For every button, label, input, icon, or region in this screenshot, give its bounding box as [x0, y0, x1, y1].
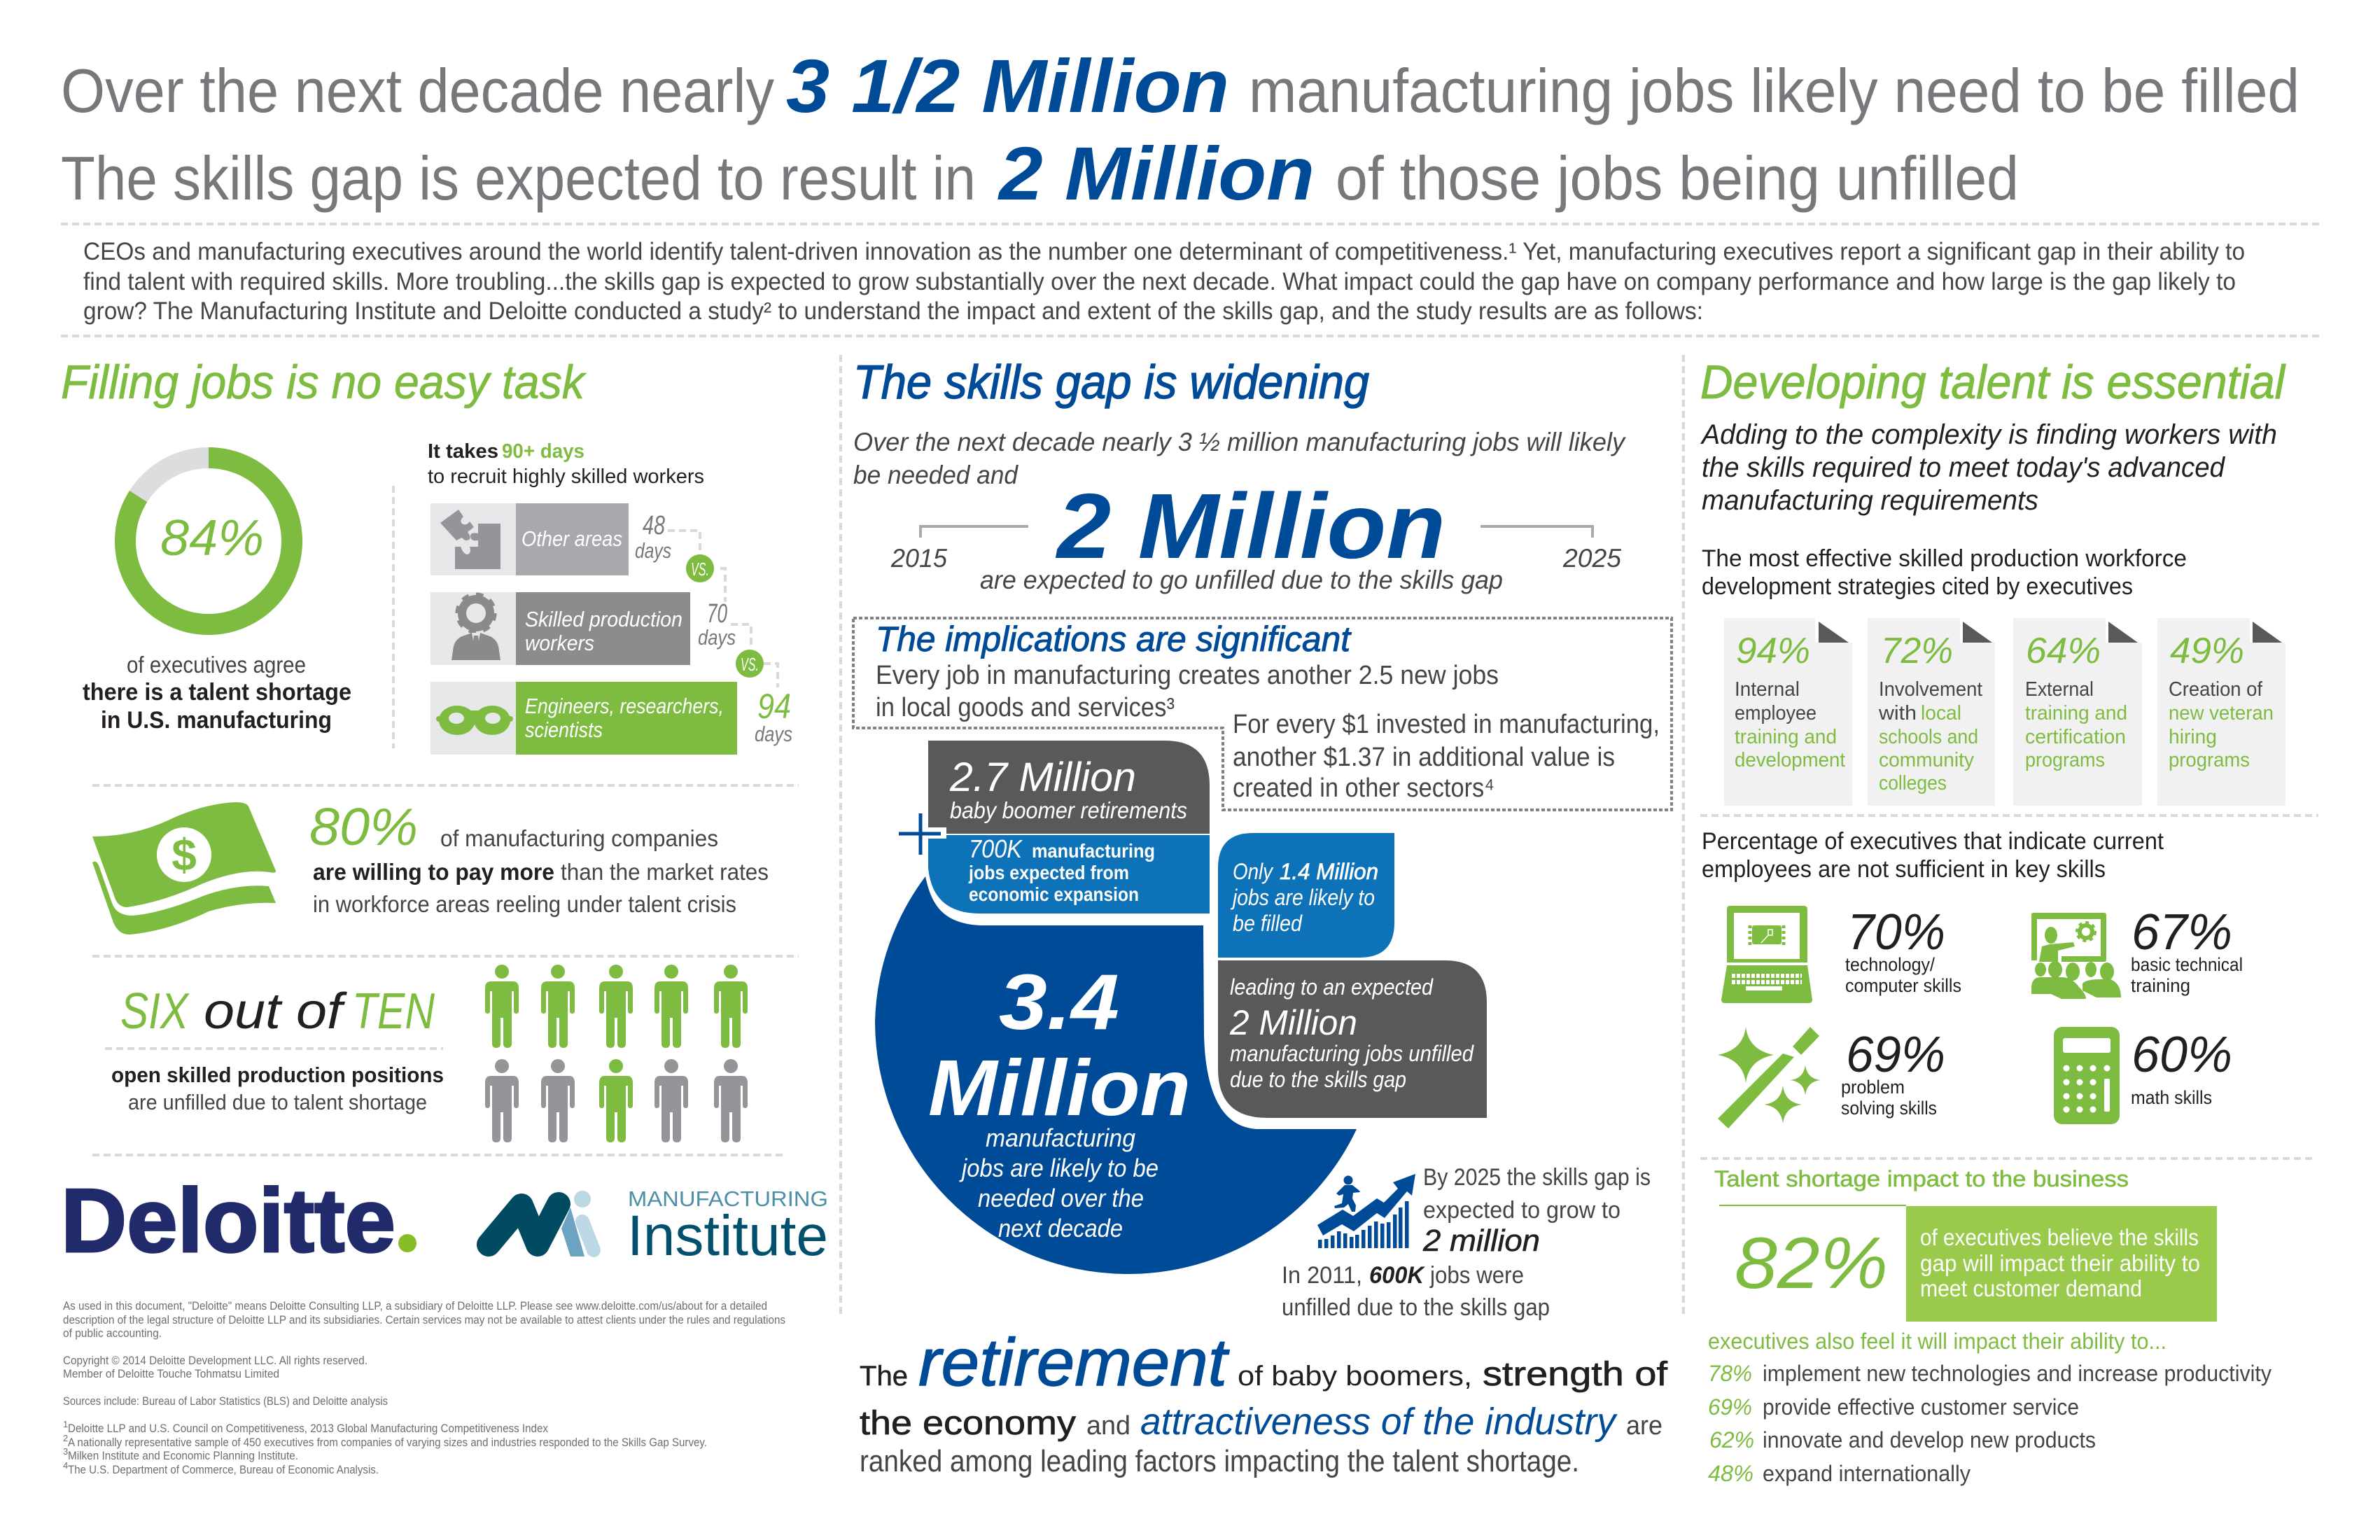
icon: money [92, 802, 276, 934]
block: 1.4 million filled: 1.4 Million [1280, 859, 1378, 884]
subheading: talent shortage impact: Talent shortage impact to the business [1714, 1166, 2129, 1191]
icon: money: $ [172, 830, 197, 880]
card: 94%: 94% [1736, 631, 1810, 671]
title: 3 1/2 Million [786, 43, 1229, 128]
footer legal text: Milken Institute and Economic Planning Institute. [68, 1449, 298, 1462]
card: 94%: employee [1735, 702, 1816, 724]
skill: technical 67%: basic technical [2131, 954, 2243, 975]
callout: implications: created in other sectors⁴ [1233, 774, 1494, 803]
icon: gear person [451, 596, 500, 660]
note: in 2011: jobs were [1429, 1262, 1524, 1289]
closing statement: retirement: the economy [860, 1405, 1076, 1442]
block: 1.4 million filled: jobs are likely to [1230, 885, 1375, 910]
card: 49%: programs [2169, 749, 2250, 771]
icon: puzzle [440, 510, 500, 569]
closing statement: retirement: of baby boomers, [1238, 1361, 1472, 1392]
note: in 2011: In 2011, [1282, 1262, 1362, 1289]
block: 2.7 million retirements: baby boomer retirements [950, 797, 1187, 823]
footer legal text: description of the legal structure of Deloitte LLP and its subsidiaries. Certain services may not be available to attest clients under the rules and regulations [63, 1313, 785, 1326]
note: by 2025: 2 million [1422, 1224, 1540, 1258]
footer legal text: 4 [63, 1460, 68, 1471]
donut caption [83, 652, 351, 734]
donut caption: there is a talent shortage [83, 679, 351, 706]
intro paragraph [83, 238, 2245, 325]
subheading: strategies [1702, 545, 2187, 600]
card: 94%: Internal [1735, 678, 1800, 701]
block: 3.4 million [875, 876, 1357, 1274]
footer legal text: 1 [63, 1419, 68, 1429]
callout: implications: another $1.37 in additional value is [1233, 743, 1615, 772]
heading: developing talent: Developing talent is essential [1700, 356, 2286, 409]
footer legal text: 2 [63, 1433, 68, 1443]
block: 3.4 million: jobs are likely to be [958, 1154, 1158, 1182]
footer legal text: The U.S. Department of Commerce, Bureau of Economic Analysis. [68, 1463, 379, 1476]
block: 2.7 million retirements: 2.7 Million [949, 755, 1136, 800]
stat: six out of ten: TEN [352, 983, 435, 1040]
card: 72%: community [1879, 749, 1974, 771]
icon: calculator [2054, 1027, 2120, 1124]
bar: engineers: Engineers, researchers, [525, 694, 724, 718]
stat: 80% pay more: than the market rates [561, 859, 769, 885]
stat: six out of ten: out of [204, 983, 348, 1040]
block: 1.4 million filled [1218, 833, 1394, 958]
skill: technology 70%: 70% [1847, 904, 1945, 960]
stat: six out of ten: open skilled production positions [111, 1063, 444, 1087]
callout: implications: For every $1 invested in manufacturing, [1233, 710, 1660, 739]
bar: skilled production workers [430, 592, 690, 665]
donut chart: 84% [125, 458, 292, 624]
skill: technology 70%: computer skills [1845, 975, 1961, 996]
intro text: be needed and [853, 461, 1018, 489]
card: 94%: training and [1735, 726, 1837, 748]
intro italic text: the skills required to meet today's advanced [1702, 452, 2226, 483]
days comparison labels: VS. [741, 654, 759, 675]
intro paragraph: grow? The Manufacturing Institute and Deloitte conducted a study² to understand the impact and extent of the skills gap, and the study results are as follows: [83, 298, 1703, 325]
note: by 2025: expected to grow to [1423, 1197, 1620, 1224]
block: 1.4 million filled: be filled [1233, 911, 1303, 936]
list: other impacts: 48% [1708, 1461, 1754, 1486]
skill: math 60%: math skills [2131, 1087, 2212, 1108]
days comparison labels: 48 [643, 511, 665, 540]
title: 2 Million [997, 131, 1315, 216]
block: 700K expansion: economic expansion [969, 883, 1139, 905]
note: by 2025: By 2025 the skills gap is [1423, 1164, 1651, 1191]
skill: math 60%: 60% [2132, 1027, 2232, 1083]
closing statement: retirement: ranked among leading factors impacting the talent shortage. [860, 1444, 1579, 1478]
skill: technical 67%: training [2131, 975, 2190, 996]
footer legal text: Member of Deloitte Touche Tohmatsu Limited [63, 1367, 279, 1380]
days comparison labels [635, 511, 792, 746]
card: 64%: External [2025, 678, 2094, 701]
closing statement: retirement: retirement [918, 1325, 1229, 1400]
stat: six out of ten: are unfilled due to talent shortage [128, 1090, 427, 1114]
logo: Manufacturing Institute [489, 1186, 828, 1268]
recruit heading: 90+ days [502, 440, 584, 463]
closing statement: retirement: strength of [1483, 1356, 1668, 1393]
skill: technical 67% [2031, 904, 2243, 999]
note: in 2011: unfilled due to the skills gap [1282, 1294, 1550, 1321]
footer legal text: 3 [63, 1446, 68, 1457]
icon: presenter and audience [2031, 913, 2121, 999]
footer legal text: of public accounting. [63, 1326, 162, 1340]
block: 2 million unfilled: manufacturing jobs unfilled [1230, 1041, 1474, 1066]
stat: 82%: gap will impact their ability to [1920, 1250, 2200, 1276]
skill: technology 70%: technology/ [1845, 954, 1935, 975]
footer legal text: As used in this document, "Deloitte" means Deloitte Consulting LLP, a subsidiary of Deloitte LLP. Please see www.deloitte.com/us/about for a detailed [63, 1299, 767, 1312]
skill: problem solving 69%: problem [1841, 1077, 1905, 1098]
block: 2 million unfilled [1218, 960, 1487, 1118]
card: 49% [2157, 618, 2286, 806]
list: other impacts [1708, 1329, 2272, 1486]
panel: skills gap widening [853, 356, 1672, 1478]
intro italic text: manufacturing requirements [1702, 485, 2038, 516]
title: The skills gap is expected to result in [61, 144, 976, 213]
list: other impacts: provide effective customer service [1763, 1394, 2079, 1420]
skill: problem solving 69%: solving skills [1841, 1098, 1937, 1119]
card: 72% [1868, 618, 1995, 806]
callout: implications [853, 618, 1672, 810]
recruit heading: to recruit highly skilled workers [428, 465, 704, 488]
days comparison labels: 70 [707, 599, 727, 629]
card: 72%: with [1878, 702, 1917, 724]
card: 64% [2013, 618, 2142, 806]
block: 700K expansion: 700K [969, 834, 1023, 863]
bar: other areas [430, 503, 629, 575]
heading: skills gap: The skills gap is widening [853, 356, 1369, 409]
bar: skilled production workers: Skilled production [525, 607, 682, 631]
list: other impacts: executives also feel it will impact their ability to... [1708, 1329, 2166, 1354]
stat: six out of ten [111, 983, 444, 1114]
card: 72%: local [1921, 702, 1961, 724]
block: 2 million unfilled: due to the skills gap [1230, 1067, 1406, 1092]
stat: 80% pay more: in workforce areas reeling under talent crisis [313, 891, 736, 917]
card: 64%: training and [2025, 702, 2127, 724]
skill: technical 67%: 67% [2132, 904, 2232, 960]
card: 72%: schools and [1879, 726, 1978, 748]
plus sign [899, 813, 946, 855]
list: other impacts: expand internationally [1763, 1461, 1970, 1486]
card: 49%: new veteran [2169, 702, 2274, 724]
title: Over the next decade nearly [61, 56, 774, 125]
panel: filling jobs [61, 356, 792, 755]
stat: 82% [1719, 1205, 2217, 1322]
days comparison labels: days [755, 722, 792, 746]
timeline: 2 million 2015 to 2025 [890, 475, 1621, 594]
block: 3.4 million: next decade [998, 1214, 1123, 1242]
card: 49%: 49% [2170, 631, 2244, 671]
footer legal text: A nationally representative sample of 450 executives from companies of varying sizes and industries responded to the Skills Gap Survey. [68, 1436, 707, 1449]
subheading: key skills: employees are not sufficient in key skills [1702, 856, 2106, 883]
skill: math 60% [2054, 1027, 2232, 1124]
list: other impacts: 78% [1708, 1361, 1752, 1386]
title: of those jobs being unfilled [1336, 144, 2019, 213]
skill: technology 70% [1721, 904, 1961, 1003]
intro text [853, 428, 1626, 489]
stat: 80% pay more: of manufacturing companies [440, 825, 718, 851]
card: 72%: 72% [1881, 631, 1953, 671]
closing statement: retirement [860, 1325, 1668, 1478]
stat: 80% pay more: are willing to pay more [313, 859, 554, 885]
bar: other areas: Other areas [522, 526, 622, 551]
closing statement: retirement: are [1626, 1411, 1662, 1441]
icon: glasses [436, 706, 513, 735]
donut caption: in U.S. manufacturing [101, 707, 332, 734]
card: 49%: Creation of [2169, 678, 2263, 701]
bar: engineers: scientists [525, 718, 603, 742]
timeline: 2 million 2015 to 2025: 2015 [890, 544, 947, 573]
skill: problem solving 69% [1718, 1027, 1945, 1128]
intro italic text [1700, 419, 2277, 516]
skill: problem solving 69%: 69% [1846, 1027, 1945, 1083]
intro text: Over the next decade nearly 3 ½ million manufacturing jobs will likely [853, 428, 1626, 456]
block: 3.4 million: 3.4 [999, 958, 1119, 1046]
footer legal text [63, 1299, 785, 1476]
icon: growth chart with runner [1317, 1174, 1415, 1248]
logo: Manufacturing Institute: MANUFACTURING [628, 1186, 828, 1211]
stat: six out of ten: SIX [120, 983, 190, 1040]
intro italic text: Adding to the complexity is finding workers with [1700, 419, 2277, 450]
list: other impacts: 69% [1708, 1394, 1752, 1420]
card: 94% [1724, 618, 1852, 806]
timeline: 2 million 2015 to 2025: 2025 [1562, 544, 1621, 573]
card: 64%: 64% [2026, 631, 2101, 671]
note: by 2025 [1422, 1164, 1651, 1258]
closing statement: retirement: The [860, 1361, 908, 1392]
days comparison labels: 94 [757, 687, 791, 726]
stat: 82%: of executives believe the skills [1920, 1224, 2199, 1250]
callout: implications: in local goods and services³ [876, 693, 1175, 722]
block: 3.4 million: Million [928, 1044, 1191, 1132]
days comparison labels: days [635, 538, 671, 563]
recruit heading [428, 440, 704, 488]
block: 1.4 million filled: Only [1233, 859, 1274, 884]
block: 2 million unfilled: 2 Million [1229, 1003, 1357, 1042]
list: other impacts: 62% [1709, 1427, 1754, 1452]
block: 700K expansion: jobs expected from [968, 862, 1129, 883]
stat: 80% pay more [309, 797, 769, 917]
block: 3.4 million: manufacturing [986, 1124, 1135, 1152]
card: 94%: development [1735, 749, 1845, 771]
stat: 80% pay more: 80% [309, 797, 418, 856]
footer legal text: Copyright © 2014 Deloitte Development LLC. All rights reserved. [63, 1354, 368, 1367]
block: 700K expansion [928, 834, 1210, 913]
logo: Deloitte: Deloitte [61, 1170, 396, 1271]
card: 64%: certification [2025, 726, 2126, 748]
days comparison labels: VS. [691, 559, 709, 580]
pictogram: ten people [485, 965, 748, 1142]
timeline: 2 million 2015 to 2025: are expected to go unfilled due to the skills gap [980, 566, 1503, 594]
intro paragraph: find talent with required skills. More troubling...the skills gap is expected to grow substantially over the next decade. What impact could the gap have on company performance and how large is the gap likely to [83, 268, 2236, 295]
block: 700K expansion: manufacturing [1032, 840, 1155, 862]
donut chart: 84%: 84% [160, 510, 264, 566]
panel: developing talent [1700, 356, 2318, 1486]
list: other impacts: innovate and develop new products [1763, 1427, 2096, 1452]
card: 72%: colleges [1879, 772, 1947, 794]
donut caption: of executives agree [127, 652, 306, 678]
title [61, 43, 2300, 216]
closing statement: retirement: and [1086, 1411, 1130, 1441]
card: 72%: Involvement [1879, 678, 1982, 701]
icon: magic wand [1718, 1027, 1821, 1128]
note: in 2011 [1282, 1262, 1550, 1321]
card: 64%: programs [2025, 749, 2105, 771]
list: other impacts: implement new technologies and increase productivity [1763, 1361, 2272, 1386]
timeline: 2 million 2015 to 2025: 2 Million [1055, 475, 1446, 578]
logo: Manufacturing Institute: Institute [627, 1204, 828, 1268]
intro paragraph: CEOs and manufacturing executives around the world identify talent-driven innovation as the number one determinant of competitiveness.¹ Yet, manufacturing executives report a significant gap in their ability to [83, 238, 2245, 265]
recruit heading: It takes [428, 440, 498, 463]
stat: 82%: 82% [1735, 1223, 1888, 1304]
closing statement: retirement: attractiveness of the industry [1140, 1401, 1618, 1443]
footer legal text: Sources include: Bureau of Labor Statistics (BLS) and Deloitte analysis [63, 1394, 388, 1408]
title: manufacturing jobs likely need to be filled [1249, 56, 2300, 125]
callout: implications: The implications are significant [876, 620, 1352, 659]
subheading: strategies: development strategies cited by executives [1702, 573, 2133, 600]
subheading: key skills [1702, 828, 2164, 883]
card: 49%: hiring [2169, 726, 2217, 748]
icon: laptop [1721, 906, 1812, 1003]
footer legal text: Deloitte LLP and U.S. Council on Competitiveness, 2013 Global Manufacturing Competitiveness Index [68, 1422, 548, 1435]
days comparison labels: days [698, 625, 736, 650]
block: 2 million unfilled: leading to an expected [1230, 974, 1434, 1000]
block: 3.4 million: needed over the [978, 1184, 1144, 1212]
subheading: strategies: The most effective skilled production workforce [1702, 545, 2187, 572]
note: in 2011: 600K [1369, 1262, 1425, 1289]
stat: 82%: meet customer demand [1920, 1275, 2142, 1301]
bar: engineers [430, 682, 737, 755]
bar: skilled production workers: workers [525, 631, 594, 655]
callout: implications: Every job in manufacturing creates another 2.5 new jobs [876, 661, 1499, 690]
subheading: key skills: Percentage of executives that indicate current [1702, 828, 2164, 855]
block: 2.7 million retirements [928, 741, 1210, 834]
heading: filling jobs: Filling jobs is no easy task [61, 356, 587, 409]
